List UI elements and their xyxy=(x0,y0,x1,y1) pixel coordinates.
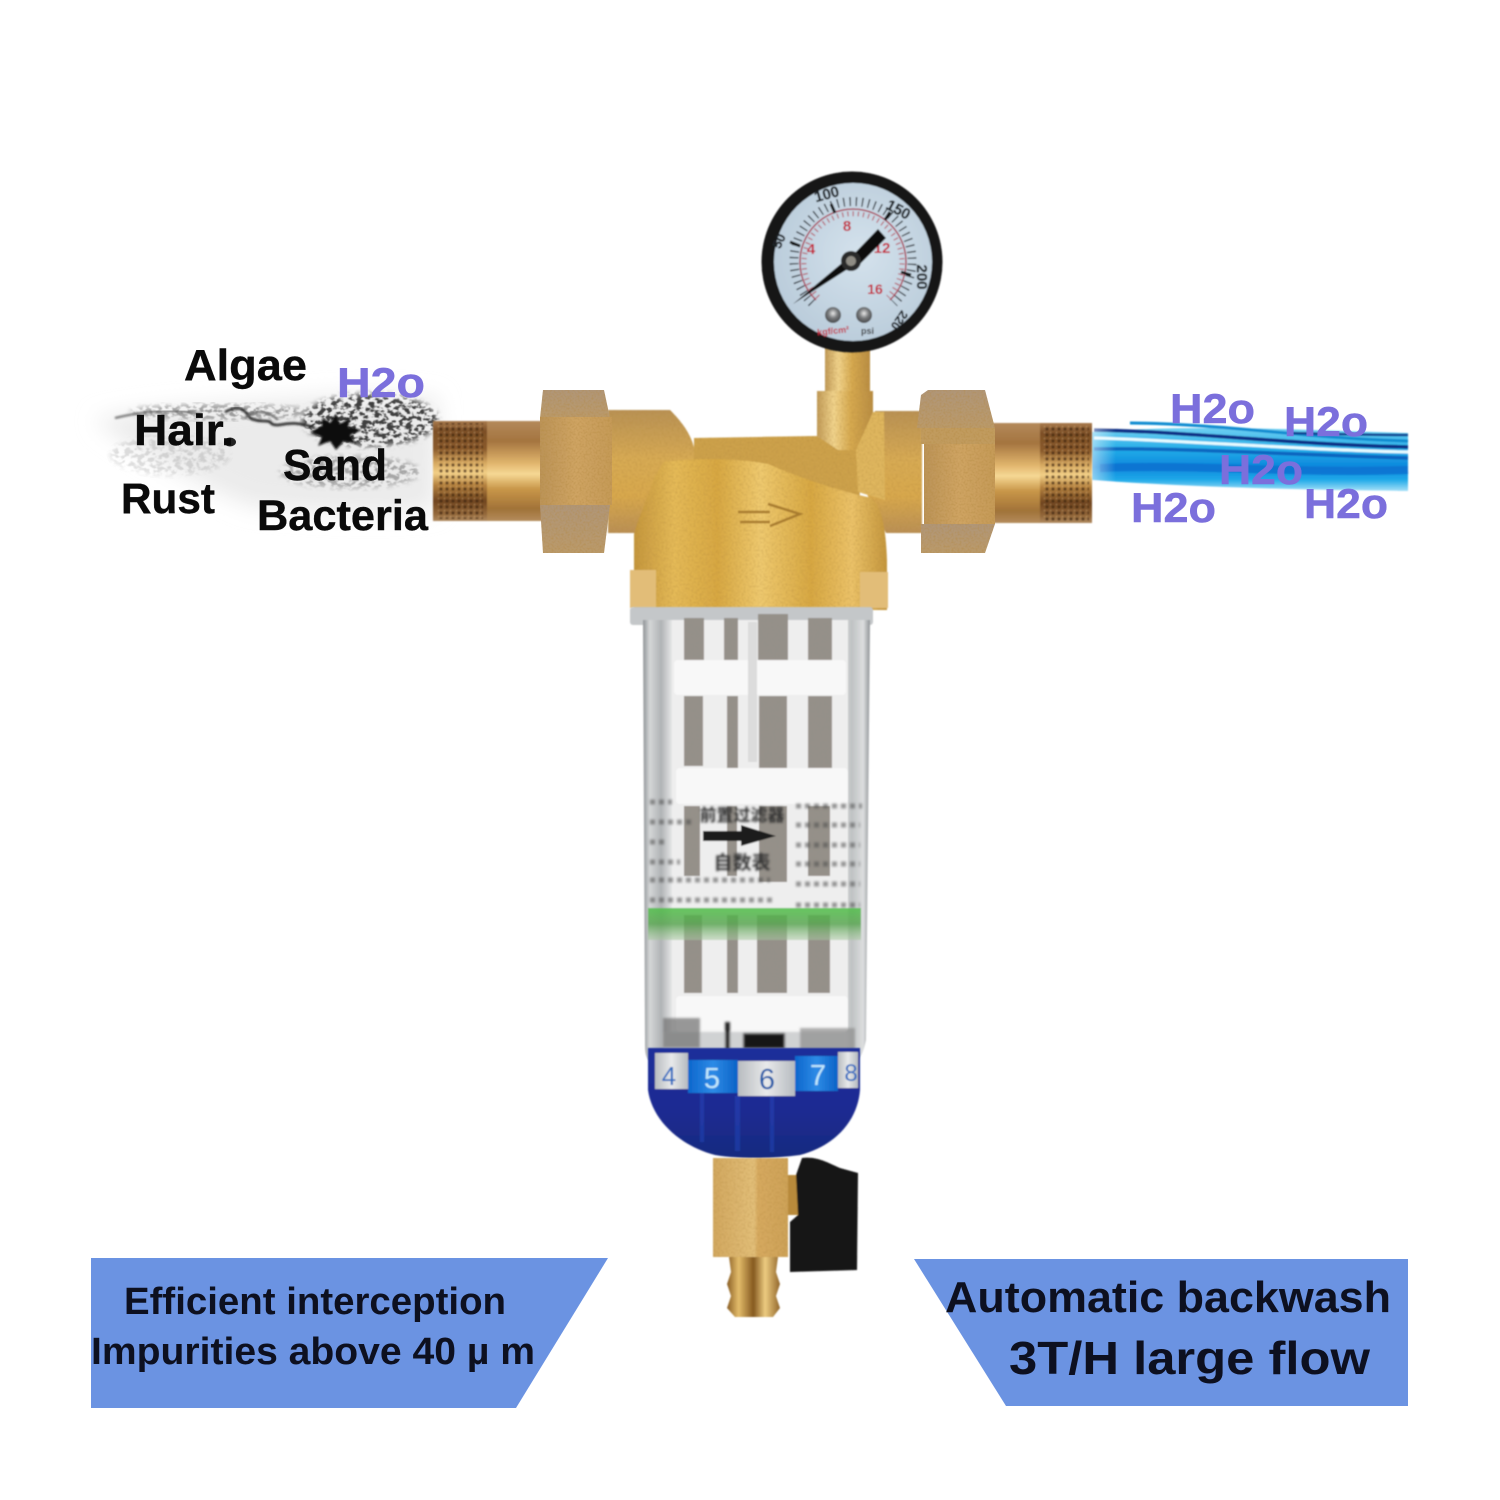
label subtitle: 自数表 xyxy=(713,852,771,874)
filter head dome xyxy=(634,459,887,610)
bowl shell xyxy=(643,620,870,1060)
unit labels xyxy=(817,324,874,338)
black handle xyxy=(790,1158,858,1272)
inner scale numbers: 16 xyxy=(867,281,883,297)
numbered scale band: 5 xyxy=(704,1063,720,1095)
central rib xyxy=(748,622,757,762)
right flare xyxy=(856,412,885,500)
debris cloud of impurities entering the inlet xyxy=(108,388,443,515)
impurity labels: Bacteria xyxy=(257,492,429,540)
callout: automatic backwash: Automatic backwash xyxy=(945,1273,1391,1322)
impurity labels: Rust xyxy=(121,475,215,523)
rivets xyxy=(825,307,872,323)
outer scale numbers: 150 xyxy=(883,197,913,223)
outer scale numbers: 100 xyxy=(813,183,841,206)
inner scale numbers xyxy=(807,218,890,297)
bowl base reflections xyxy=(663,1018,855,1052)
callout: efficient interception xyxy=(91,1258,608,1408)
pressure gauge xyxy=(762,172,942,352)
outer scale numbers xyxy=(769,183,930,333)
inner red scale xyxy=(800,209,906,300)
H2o labels: H2o xyxy=(1219,446,1303,493)
upper channel xyxy=(694,436,860,500)
numbered scale band: 6 xyxy=(759,1064,775,1096)
callout: automatic backwash: 3T/H large flow xyxy=(1009,1332,1370,1384)
numbered scale band: 7 xyxy=(810,1060,826,1092)
H2o labels: H2o xyxy=(1304,480,1388,527)
bowl top flange xyxy=(630,607,873,625)
callout: efficient interception: Impurities above 40 µ m xyxy=(91,1331,535,1373)
right union nut xyxy=(917,390,995,553)
H2o labels: H2o xyxy=(1131,484,1216,531)
green print band xyxy=(648,908,861,940)
label title: 前置过滤器 xyxy=(700,806,784,825)
inner scale numbers: 4 xyxy=(807,241,816,258)
flow direction arrow xyxy=(738,504,800,526)
impurity labels xyxy=(121,341,429,540)
barb hose fitting xyxy=(727,1257,780,1317)
unit labels: psi xyxy=(861,326,874,336)
valve hex body xyxy=(713,1158,788,1257)
left union nut xyxy=(540,390,612,553)
callout: efficient interception: Efficient interception xyxy=(124,1281,506,1323)
stainless mesh windows xyxy=(684,614,832,993)
white filter core xyxy=(672,620,848,1030)
left collar xyxy=(608,410,695,533)
numbered scale band: 4 xyxy=(662,1061,676,1091)
numbered scale band: 8 xyxy=(844,1060,858,1087)
water jet leaving the outlet xyxy=(1092,420,1408,492)
vertical stem block xyxy=(817,391,873,450)
printed label panel xyxy=(700,806,784,874)
outlet threaded pipe xyxy=(990,423,1092,523)
brass main body xyxy=(608,391,922,610)
H2o labels: H2o xyxy=(337,359,425,406)
outer scale numbers: 50 xyxy=(769,231,789,251)
inlet threaded pipe xyxy=(433,421,543,521)
valve stem xyxy=(788,1175,800,1215)
impurity labels: Hair. xyxy=(134,406,234,455)
drain valve xyxy=(713,1158,858,1317)
numbered scale band xyxy=(655,1052,858,1096)
gauge stem xyxy=(825,345,870,395)
gauge bezel xyxy=(762,172,942,352)
outer psi scale ticks xyxy=(794,202,912,303)
inner scale numbers: 12 xyxy=(874,240,890,257)
transparent filter bowl xyxy=(630,607,873,1060)
outer scale numbers: 220 xyxy=(888,308,911,333)
major ticks xyxy=(790,204,911,275)
white retaining rings xyxy=(674,660,848,1032)
inner scale numbers: 8 xyxy=(843,218,851,235)
H2o labels: H2o xyxy=(1284,398,1368,445)
label arrow xyxy=(703,825,776,846)
H2o labels: H2o xyxy=(1170,385,1255,432)
blue base cap xyxy=(648,1048,860,1158)
gauge face xyxy=(774,183,932,341)
printed fine lines xyxy=(650,802,862,905)
outer scale numbers: 200 xyxy=(913,264,930,290)
impurity labels: Sand xyxy=(283,441,387,490)
impurity labels: Algae xyxy=(184,341,307,390)
H2o labels xyxy=(337,359,1388,531)
callout: automatic backwash xyxy=(914,1259,1408,1406)
needle xyxy=(793,229,886,304)
right collar xyxy=(860,411,922,533)
unit labels: kgf/cm² xyxy=(817,324,850,338)
head side lugs xyxy=(630,570,888,608)
